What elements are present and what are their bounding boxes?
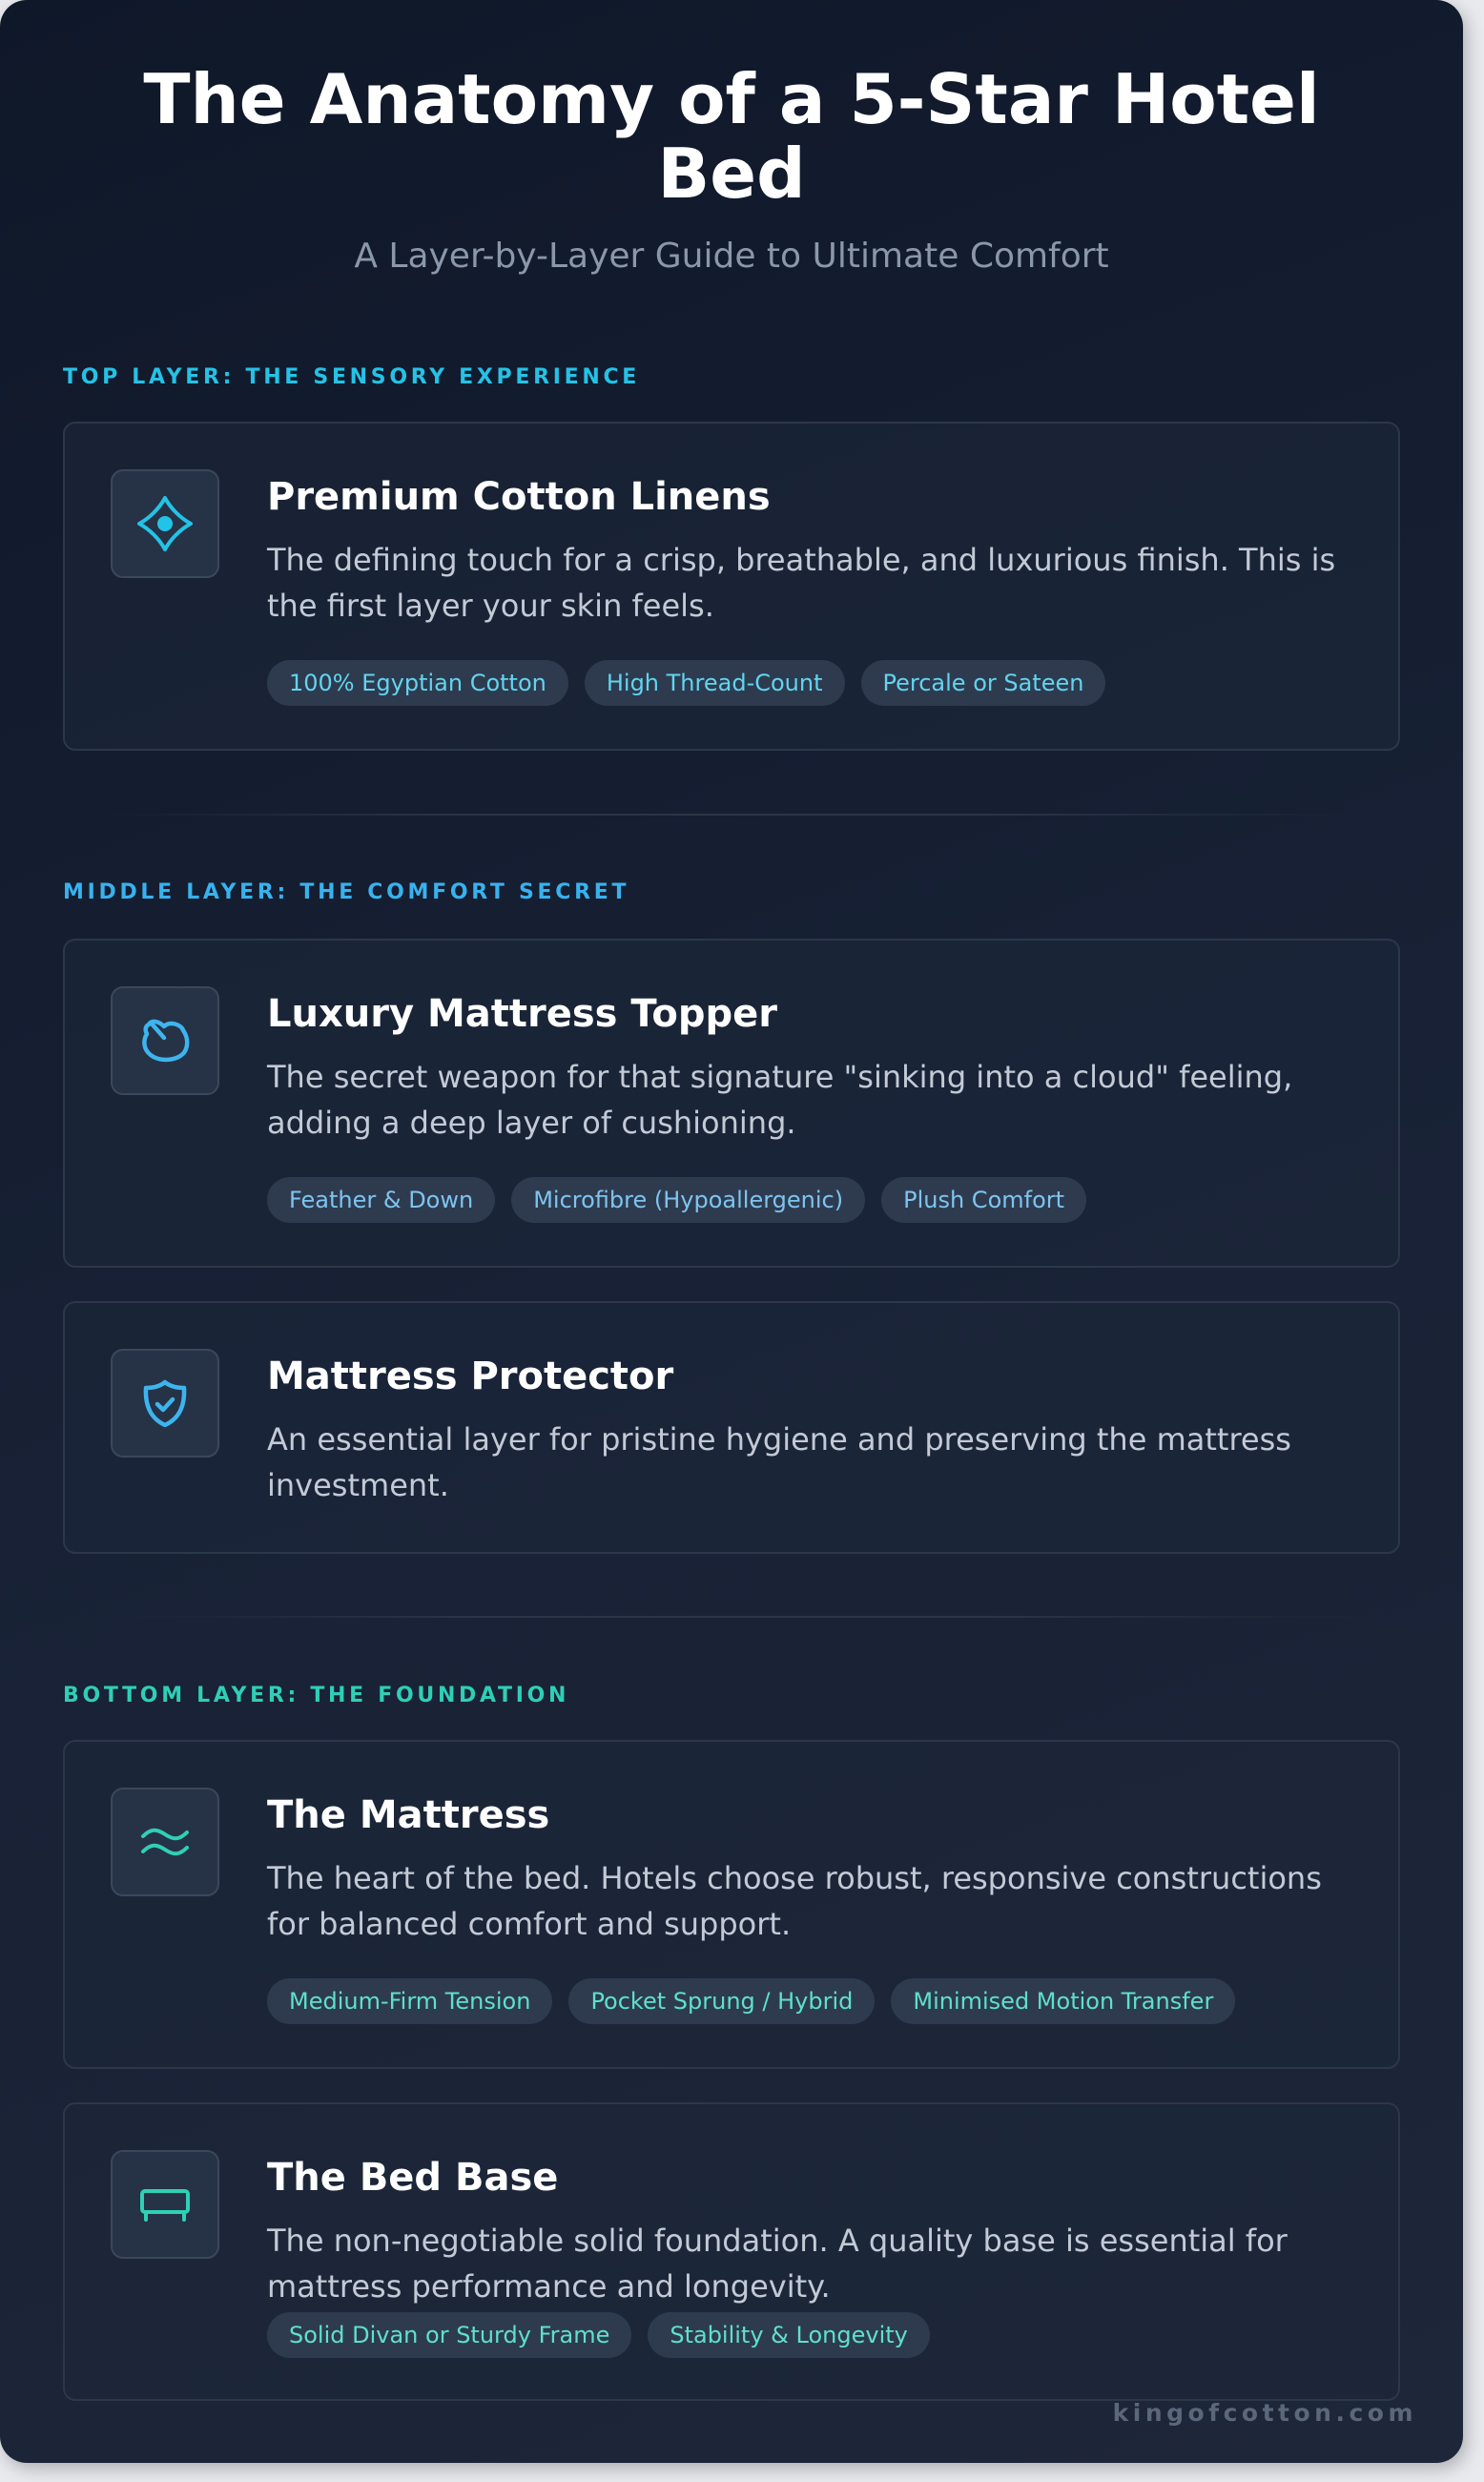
card description: The defining touch for a crisp, breathable, and luxurious finish. This is the first layer your skin feels. <box>267 542 1335 624</box>
card: the mattress <box>63 1740 1400 2069</box>
title <box>143 59 1320 214</box>
card: mattress protector <box>63 1301 1400 1554</box>
tags: Stability & Longevity <box>670 2322 908 2348</box>
tags: Microfibre (Hypoallergenic) <box>533 1187 843 1213</box>
card description: An essential layer for pristine hygiene and preserving the mattress investment. <box>267 1421 1291 1503</box>
tags: Medium-Firm Tension <box>289 1988 530 2015</box>
tags <box>267 2312 930 2358</box>
card description: The secret weapon for that signature "sinking into a cloud" feeling, adding a deep layer of cushioning. <box>267 1059 1292 1141</box>
tags: Feather & Down <box>289 1187 473 1213</box>
icon: cloud swirl <box>111 986 219 1095</box>
icon: bed frame <box>111 2150 219 2259</box>
tags <box>267 660 1105 706</box>
tags <box>267 1177 1086 1223</box>
card title: The Mattress <box>267 1793 549 1837</box>
tags: High Thread-Count <box>607 670 822 696</box>
tags: Plush Comfort <box>903 1187 1064 1213</box>
tags: 100% Egyptian Cotton <box>289 670 546 696</box>
tags: Pocket Sprung / Hybrid <box>590 1988 853 2015</box>
tags: Percale or Sateen <box>883 670 1083 696</box>
section label: top layer: TOP LAYER: THE SENSORY EXPERIENCE <box>63 365 640 389</box>
card title: Premium Cotton Linens <box>267 475 771 519</box>
icon: diamond star <box>111 469 219 578</box>
card title: The Bed Base <box>267 2156 558 2200</box>
card: luxury mattress topper <box>63 939 1400 1268</box>
title: The Anatomy of a 5-Star Hotel <box>143 59 1320 139</box>
section label: bottom layer: BOTTOM LAYER: THE FOUNDATION <box>63 1684 569 1707</box>
tags: Minimised Motion Transfer <box>913 1988 1213 2015</box>
subtitle: A Layer-by-Layer Guide to Ultimate Comfort <box>354 237 1109 276</box>
footer: website: kingofcotton.com <box>1113 2399 1417 2427</box>
card: the bed base <box>63 2102 1400 2401</box>
tags <box>267 1978 1235 2024</box>
card description: The non-negotiable solid foundation. A quality base is essential for mattress performance and longevity. <box>267 2223 1288 2305</box>
section label: middle layer: MIDDLE LAYER: THE COMFORT SECRET <box>63 880 629 904</box>
card: premium cotton linens <box>63 422 1400 751</box>
card title: Mattress Protector <box>267 1355 673 1398</box>
title: Bed <box>657 134 806 214</box>
icon: waves <box>111 1788 219 1896</box>
card description: The heart of the bed. Hotels choose robust, responsive constructions for balanced comfort and support. <box>267 1860 1322 1942</box>
tags: Solid Divan or Sturdy Frame <box>289 2322 609 2348</box>
icon: shield check <box>111 1349 219 1458</box>
card title: Luxury Mattress Topper <box>267 992 777 1036</box>
